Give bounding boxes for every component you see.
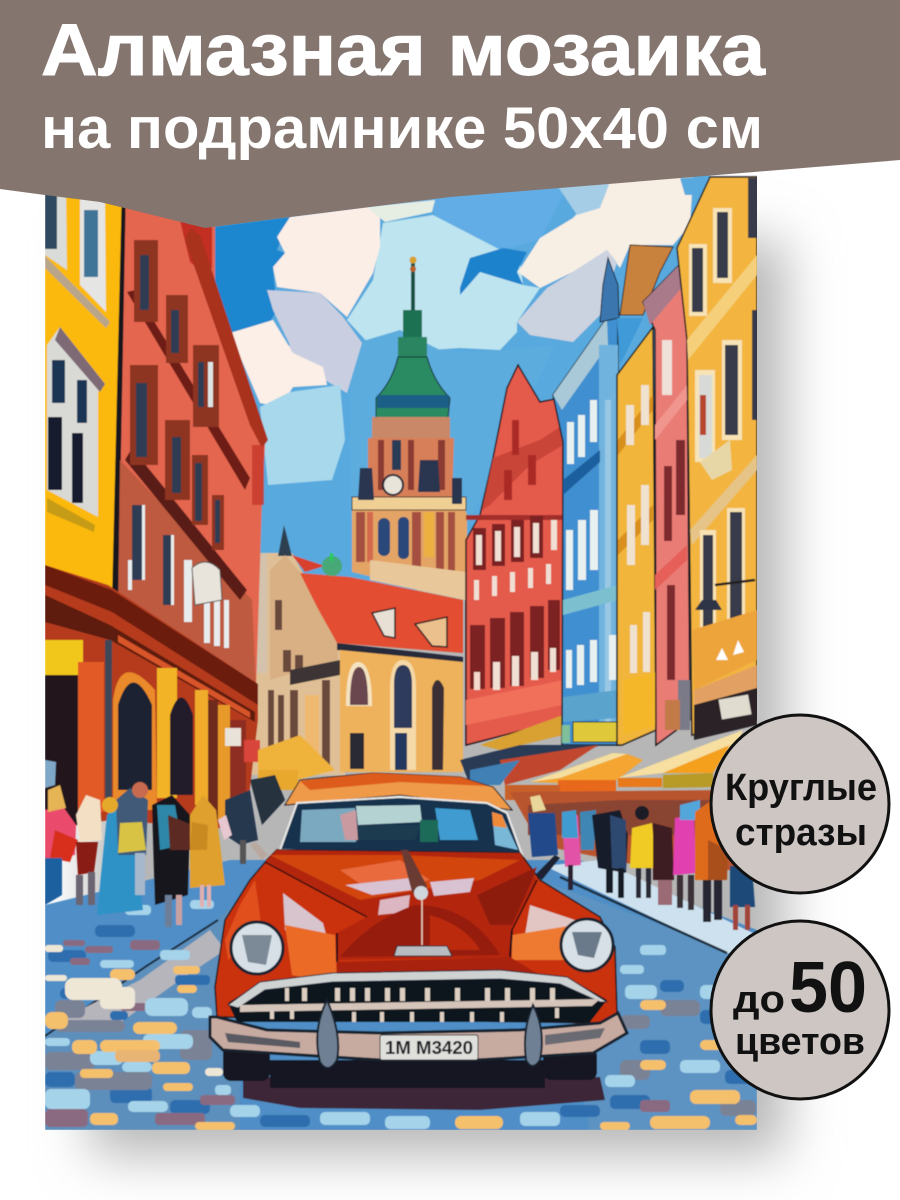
windshield <box>280 797 523 857</box>
roof <box>285 773 512 810</box>
hood ornament <box>401 850 427 898</box>
street cobblestones <box>45 860 757 1130</box>
mirrors <box>250 842 268 860</box>
badge: up to 50 colours: цветов <box>735 1021 865 1063</box>
painting on canvas <box>45 170 757 1130</box>
badge: round rhinestones: стразы <box>735 812 867 854</box>
badge: up to 50 colours: до <box>733 979 785 1021</box>
left shopfronts <box>45 565 260 830</box>
brick red gabled building <box>466 365 563 750</box>
left red building <box>118 185 268 690</box>
crowd right <box>510 790 757 930</box>
bumper <box>210 1013 627 1060</box>
back street shops <box>258 735 600 790</box>
crowd left <box>45 760 285 927</box>
grille <box>228 979 608 1023</box>
car shadow <box>243 1077 605 1110</box>
license plate <box>380 1035 478 1060</box>
subtitle: на подрамнике 50х40 см <box>41 96 763 161</box>
market awnings <box>505 730 743 800</box>
central church with red roof <box>250 525 463 775</box>
badge: up to 50 colours <box>711 921 889 1099</box>
sky and clouds <box>200 170 710 590</box>
license plate: 1M M3420 <box>385 1038 473 1058</box>
badge: round rhinestones: Круглые <box>725 767 877 809</box>
blue building <box>553 258 643 745</box>
canvas drop shadow <box>90 240 785 1155</box>
wheels <box>222 1050 598 1088</box>
headlights <box>231 922 283 974</box>
right yellow building <box>677 177 757 740</box>
car body <box>215 850 617 1023</box>
pink building <box>643 262 690 745</box>
red vintage car <box>210 773 627 1110</box>
narrow yellow building and chimney <box>617 245 673 745</box>
badge: round rhinestones <box>711 715 889 893</box>
title: Алмазная мозаика <box>41 10 767 91</box>
central clock tower <box>352 256 467 600</box>
badge: up to 50 colours: 50 <box>789 948 867 1028</box>
header banner <box>0 0 900 228</box>
left yellow building <box>45 180 130 600</box>
